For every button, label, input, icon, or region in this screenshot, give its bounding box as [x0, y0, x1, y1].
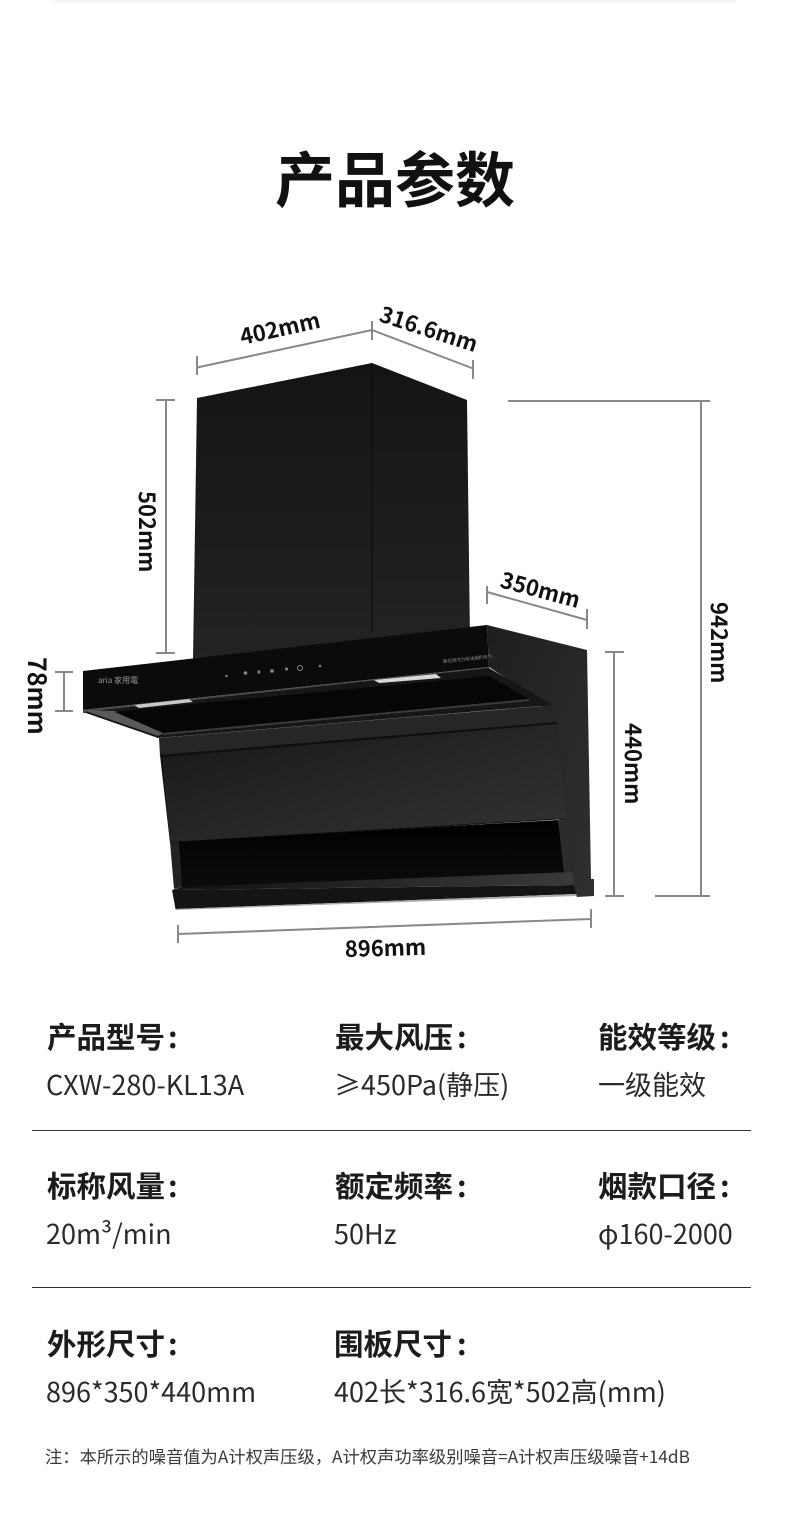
dimension: 942mm — [508, 401, 736, 896]
spec: max pressure: ≥450Pa(静压) — [334, 1064, 509, 1103]
spec: overall size — [46, 1322, 256, 1410]
spec: model: : — [168, 1015, 178, 1057]
dimension: 440mm — [605, 652, 650, 896]
spec: overall size: : — [168, 1322, 178, 1364]
divider 2 — [32, 1287, 751, 1288]
spec: max pressure — [334, 1015, 509, 1103]
hood underside — [83, 668, 553, 738]
hood front control panel — [83, 625, 493, 713]
spec: cover size: 402长*316.6宽*502高(mm) — [334, 1371, 666, 1410]
spec: airflow: 标称风量 — [47, 1164, 165, 1206]
steel handle right — [374, 674, 441, 683]
spec: duct diameter: φ160-2000 — [598, 1213, 733, 1252]
dimension: 440mm: 440mm — [618, 723, 650, 804]
oil tray — [172, 872, 577, 910]
spec: max pressure: 最大风压 — [335, 1015, 453, 1057]
spec: rated frequency: 额定频率 — [335, 1164, 453, 1206]
dimension: 78mm: 78mm — [20, 657, 56, 735]
dimension: 942mm: 942mm — [704, 602, 736, 683]
spec: cover size: : — [457, 1322, 467, 1364]
spec: duct diameter: 烟款口径 — [598, 1164, 716, 1206]
steel handle left — [134, 699, 193, 708]
dimension: 896mm: 896mm — [344, 930, 427, 964]
spec: energy rating: 一级能效 — [598, 1064, 706, 1103]
range hood product illustration — [83, 363, 594, 910]
spec: airflow — [46, 1164, 178, 1252]
spec: model — [46, 1015, 245, 1103]
dimension: 350mm — [487, 563, 587, 629]
spec: energy rating — [598, 1015, 730, 1103]
footnote: 注：本所示的噪音值为A计权声压级，A计权声功率级别噪音=A计权声压级噪音+14dB — [45, 1443, 690, 1468]
upper front band — [159, 705, 557, 756]
spec: overall size: 896*350*440mm — [46, 1371, 256, 1410]
spec: cover size: 围板尺寸 — [334, 1322, 452, 1364]
dimension: 402mm: 402mm — [237, 303, 323, 352]
title: 产品参数 — [275, 133, 515, 220]
spec: rated frequency: 50Hz — [334, 1213, 397, 1252]
dimension: 896mm — [178, 909, 591, 964]
top edge bar — [55, 0, 735, 3]
spec: duct diameter — [598, 1164, 733, 1252]
spec: rated frequency — [334, 1164, 467, 1252]
dimension: 316.6mm: 316.6mm — [376, 297, 482, 359]
chimney cover — [193, 363, 470, 660]
touch icons — [225, 665, 321, 677]
spec: max pressure: : — [457, 1015, 467, 1057]
wall back panel — [487, 625, 594, 897]
spec: rated frequency: : — [457, 1164, 467, 1206]
spec: energy rating: : — [720, 1015, 730, 1057]
left inner strip — [170, 842, 182, 889]
spec: model: 产品型号 — [47, 1015, 165, 1057]
dimension: 350mm: 350mm — [497, 563, 584, 615]
spec: energy rating: 能效等级 — [598, 1015, 716, 1057]
air intake opening — [170, 820, 566, 889]
dimension: 502mm — [132, 400, 175, 653]
spec: airflow: 20m³/min — [46, 1213, 172, 1252]
brand print: 美龙恒湾力吸油烟机电气 — [442, 653, 493, 665]
dimension: 502mm: 502mm — [132, 491, 164, 572]
divider 1 — [32, 1130, 751, 1131]
spec: model: CXW-280-KL13A — [46, 1064, 245, 1103]
spec: duct diameter: : — [720, 1164, 730, 1206]
spec: cover size — [334, 1322, 666, 1410]
dimension: 402mm — [197, 303, 372, 375]
dimension: 78mm — [20, 657, 73, 735]
main fascia panel — [160, 722, 567, 843]
spec: overall size: 外形尺寸 — [47, 1322, 165, 1364]
logo: aria 家用電 — [98, 675, 138, 686]
side strut — [558, 818, 574, 873]
spec: airflow: : — [168, 1164, 178, 1206]
